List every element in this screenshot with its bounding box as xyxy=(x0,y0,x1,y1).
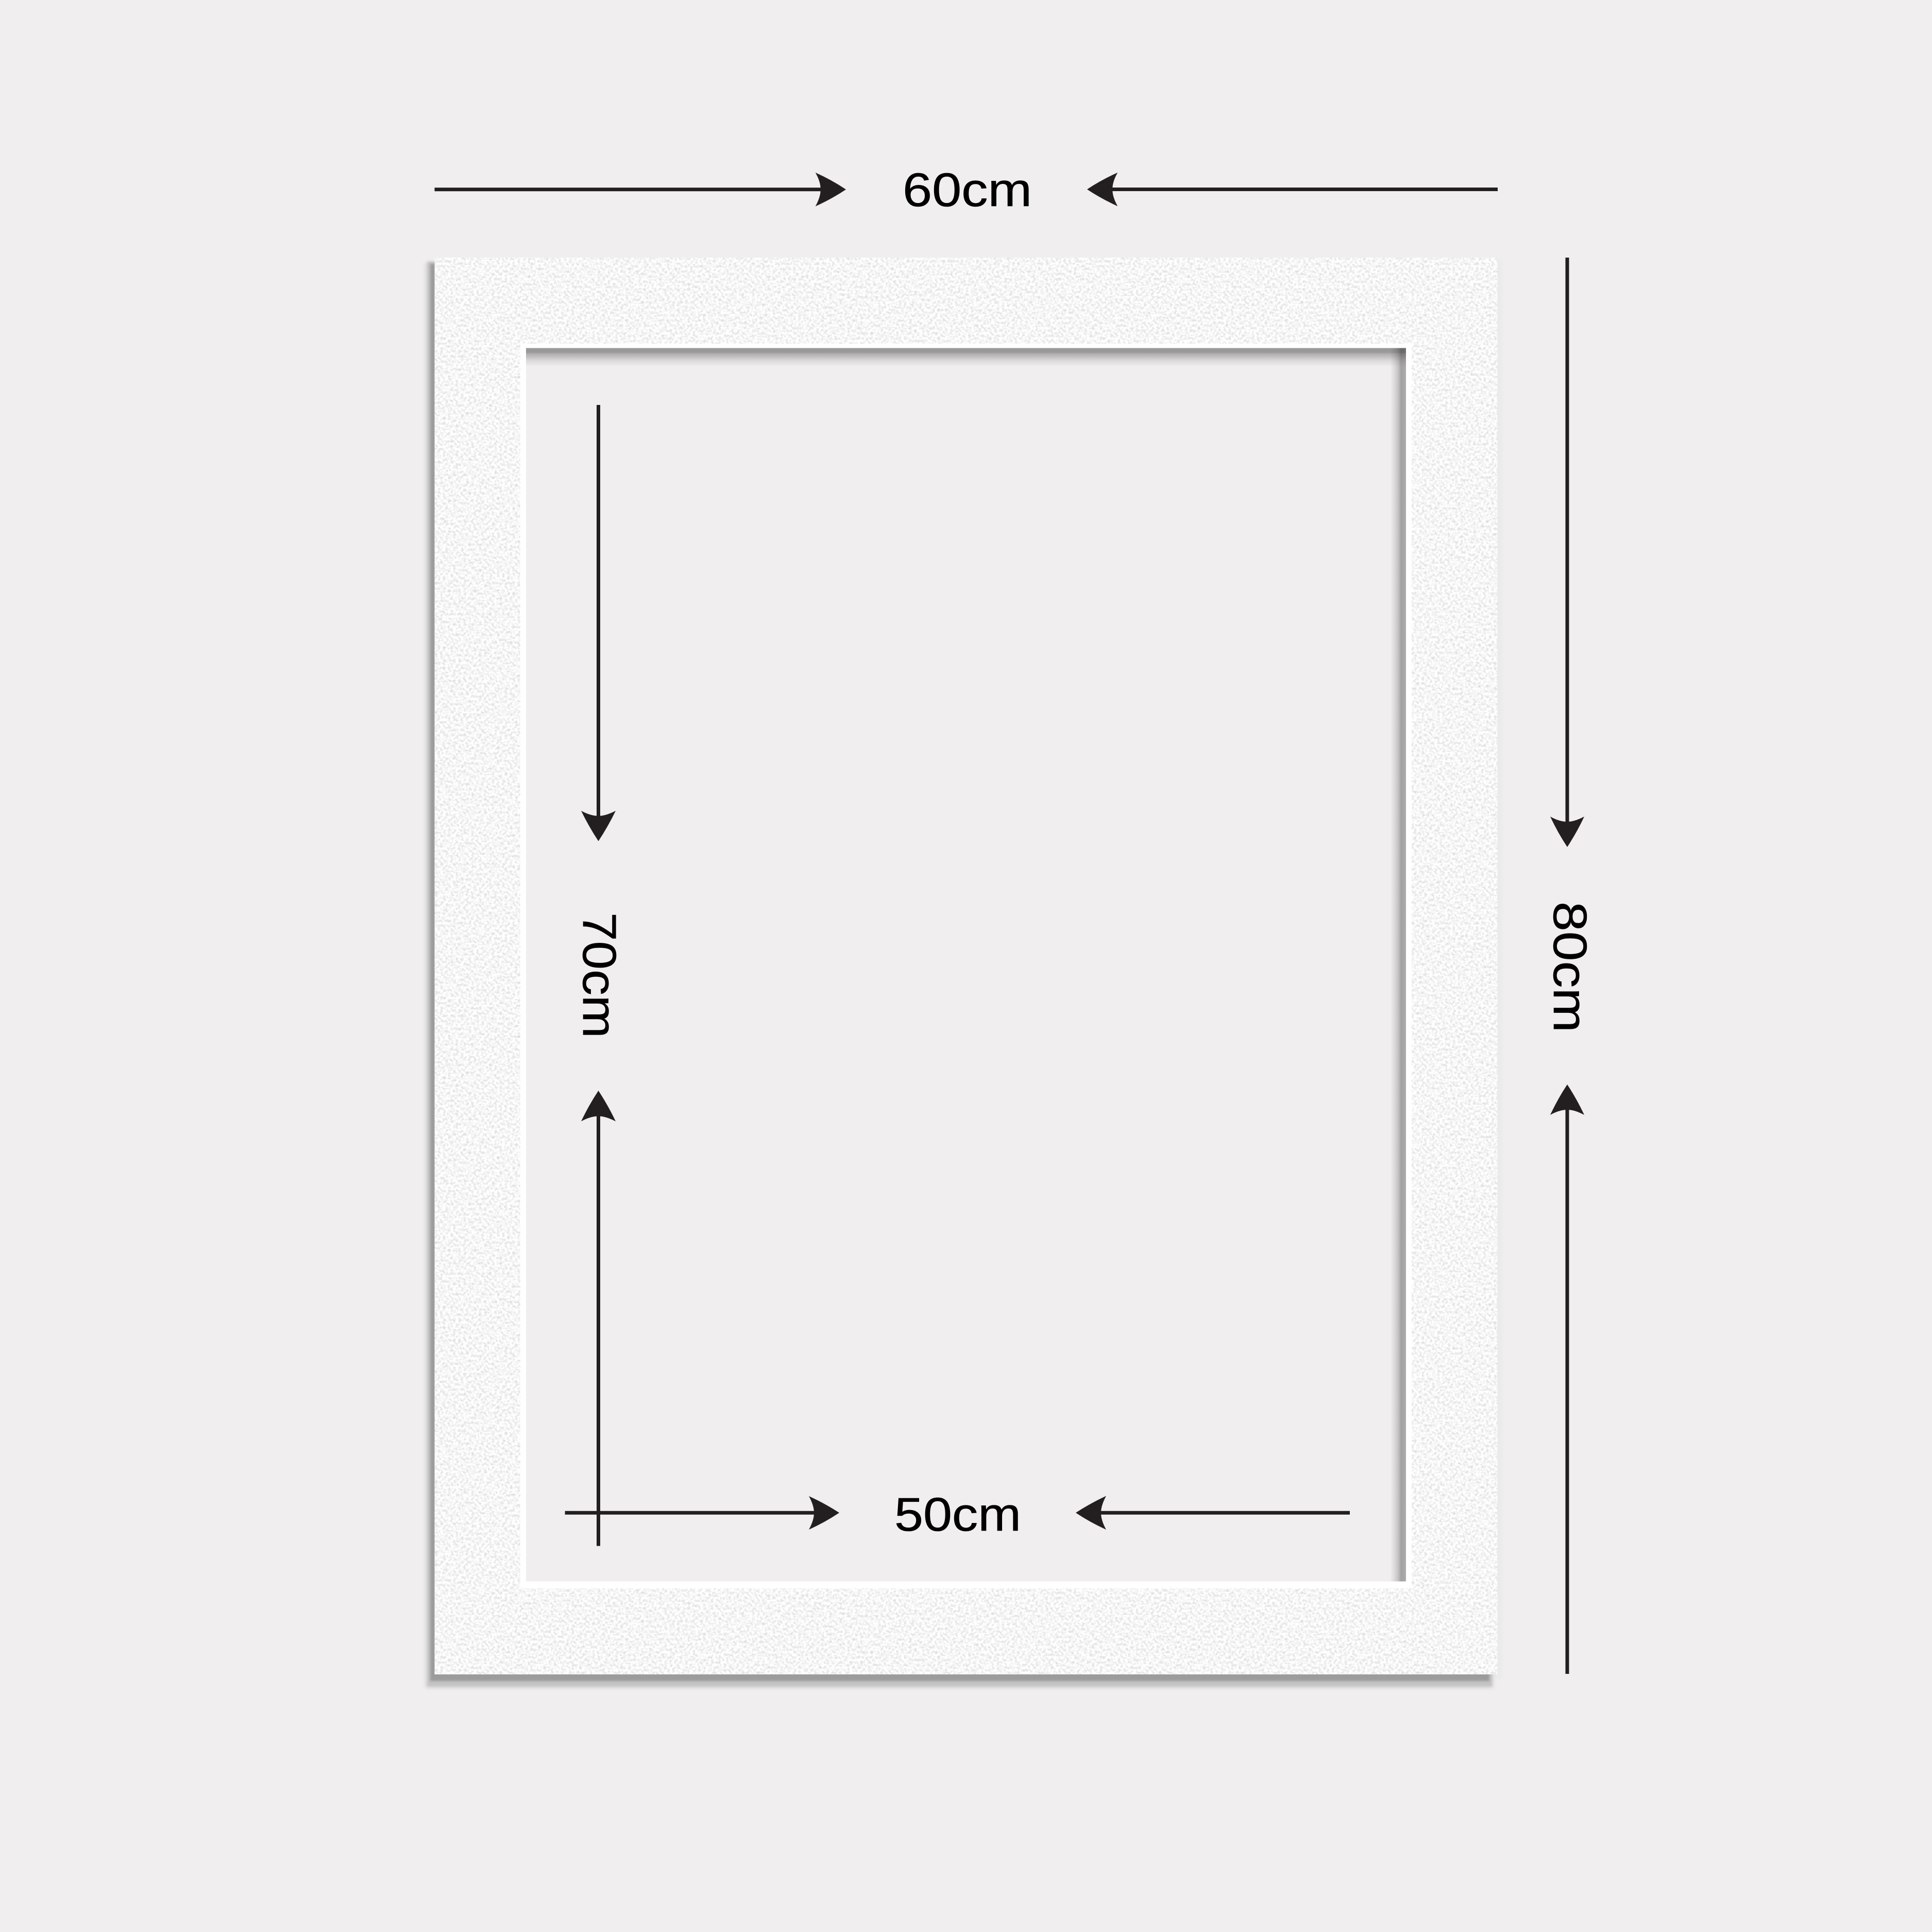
arrow: outer width, right side xyxy=(1087,173,1498,206)
label: outer width 60cm: 60cm xyxy=(903,164,1032,216)
window opening xyxy=(526,348,1406,1582)
arrow: window height, lower part xyxy=(581,1091,616,1546)
inner shadow along the right of the window xyxy=(1390,348,1406,1582)
mat drop shadow xyxy=(426,261,1502,1688)
label: outer height 80cm: 80cm xyxy=(1544,902,1596,1032)
inner shadow along the top of the window xyxy=(526,348,1406,367)
arrow: outer width, left side xyxy=(435,173,846,206)
arrow: outer height, lower part xyxy=(1550,1084,1584,1674)
arrow: window height, upper part xyxy=(581,405,616,841)
arrow: window width, right side xyxy=(1076,1496,1350,1530)
label: window width 50cm: 50cm xyxy=(894,1488,1021,1541)
panel: white photo mat with window opening xyxy=(426,258,1502,1688)
white bevelled edge of the window xyxy=(520,344,1412,1588)
label: window height 70cm: 70cm xyxy=(573,912,625,1038)
mat board with paper texture xyxy=(435,258,1497,1674)
arrow: window width, left side xyxy=(565,1496,839,1530)
arrow: outer height, upper part xyxy=(1550,258,1584,847)
